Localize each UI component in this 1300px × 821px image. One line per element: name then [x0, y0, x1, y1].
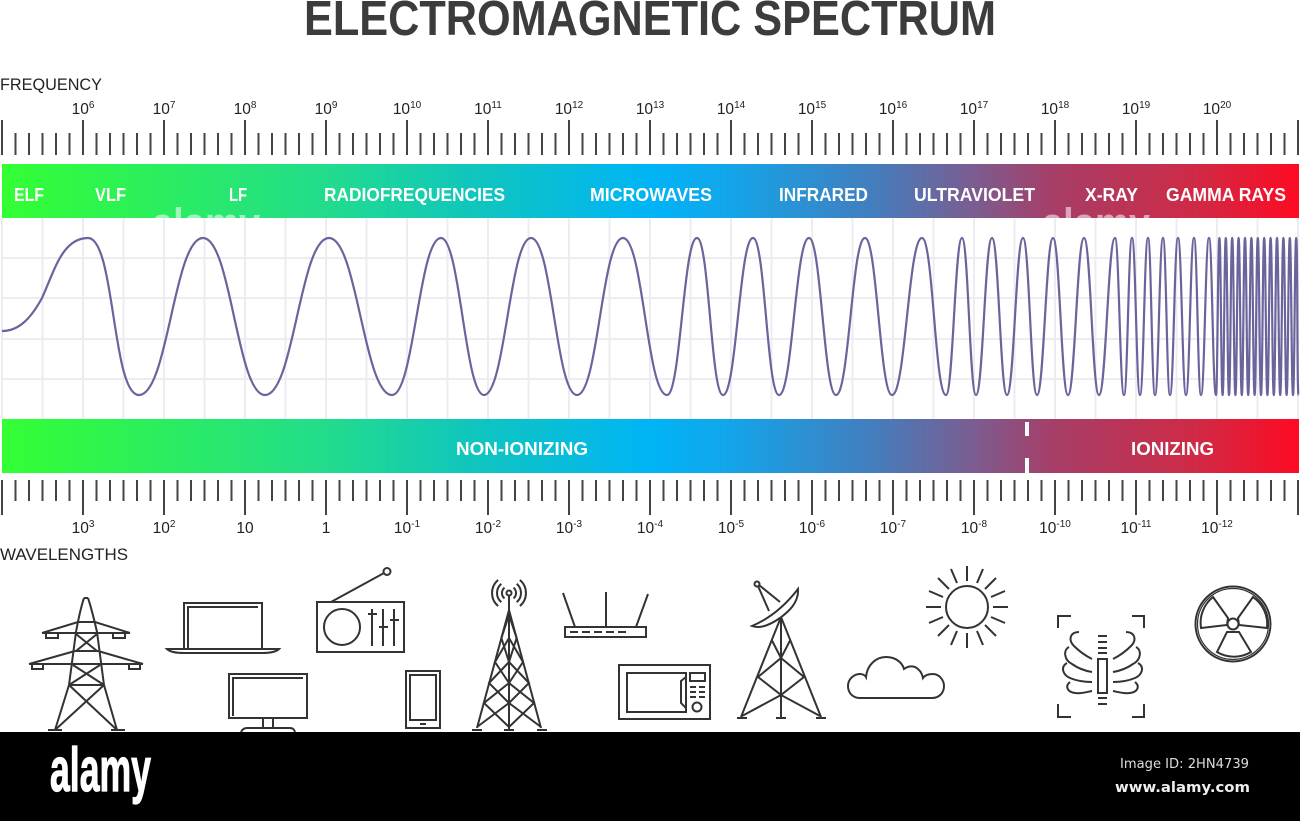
- frequency labels: 10: [153, 101, 170, 118]
- wavelength labels: -4: [654, 519, 664, 530]
- frequency labels: 10: [798, 101, 815, 118]
- icon: satellite dish tower: [737, 582, 826, 718]
- frequency labels: 19: [1139, 100, 1151, 111]
- wavelength labels: -12: [1218, 519, 1233, 530]
- website: www.alamy.com: [1115, 780, 1250, 796]
- ionization band: [2, 419, 1299, 473]
- band labels: GAMMA RAYS: [1166, 185, 1286, 205]
- frequency labels: 7: [170, 100, 176, 111]
- band labels: MICROWAVES: [590, 185, 712, 205]
- frequency labels: 10: [234, 101, 251, 118]
- frequency labels: 8: [251, 100, 257, 111]
- frequency labels: 9: [332, 100, 338, 111]
- icon: wifi router: [563, 592, 648, 637]
- wavelength labels: 10: [394, 520, 411, 537]
- watermark fragments: alamy: [152, 201, 261, 245]
- frequency labels: 6: [89, 100, 95, 111]
- wavelength labels: 2: [170, 519, 176, 530]
- wavelength labels: 1: [322, 520, 330, 537]
- icon: x-ray chest: [1058, 616, 1144, 717]
- band labels: [14, 185, 1286, 205]
- frequency labels: 10: [474, 101, 491, 118]
- wavelength tick scale: [1, 480, 1300, 515]
- wavelength labels: 3: [89, 519, 95, 530]
- wavelength labels: 10: [799, 520, 816, 537]
- wavelength labels: -2: [492, 519, 502, 530]
- wavelength labels: 10: [637, 520, 654, 537]
- wavelength labels: 10: [718, 520, 735, 537]
- wavelength labels: 10: [153, 520, 170, 537]
- frequency labels: 14: [734, 100, 746, 111]
- icon: radio tower: [472, 580, 547, 730]
- wavelength labels: -1: [411, 519, 421, 530]
- frequency labels: 13: [653, 100, 665, 111]
- frequency labels: 10: [717, 101, 734, 118]
- band labels: X-RAY: [1085, 185, 1138, 205]
- ionizing label: IONIZING: [1131, 439, 1214, 459]
- image id: Image ID: 2HN4739: [1120, 756, 1249, 772]
- band labels: LF: [229, 185, 247, 205]
- band labels: ELF: [14, 185, 44, 205]
- frequency labels: 10: [555, 101, 572, 118]
- wavelength labels: -10: [1056, 519, 1071, 530]
- non-ionizing label: NON-IONIZING: [456, 439, 588, 459]
- wavelength labels: -7: [897, 519, 907, 530]
- frequency labels: 10: [636, 101, 653, 118]
- icon: power pylon: [29, 598, 143, 730]
- frequency labels: [72, 100, 1232, 118]
- wavelength labels: [72, 519, 1233, 537]
- icon: radiation symbol: [1196, 586, 1270, 662]
- frequency labels: 18: [1058, 100, 1070, 111]
- footer bar: [0, 732, 1300, 821]
- band labels: ULTRAVIOLET: [914, 185, 1035, 205]
- frequency labels: 17: [977, 100, 989, 111]
- frequency labels: 10: [879, 101, 896, 118]
- frequency labels: 16: [896, 100, 908, 111]
- wavelength labels: 10: [1201, 520, 1218, 537]
- ionizing divider: [1025, 422, 1029, 473]
- icon: radio: [317, 568, 404, 652]
- frequency labels: 10: [410, 100, 422, 111]
- watermark fragments: alamy: [1042, 201, 1151, 245]
- band labels: VLF: [95, 185, 126, 205]
- frequency labels: 15: [815, 100, 827, 111]
- icon: sun: [926, 566, 1008, 648]
- icon: desktop monitor: [229, 674, 307, 732]
- wave chart grid: [1, 218, 1300, 419]
- band labels: INFRARED: [779, 185, 868, 205]
- wavelength labels: 10: [1039, 520, 1056, 537]
- wavelength labels: -3: [573, 519, 583, 530]
- wavelength labels: 10: [880, 520, 897, 537]
- alamy logo: alamy: [50, 736, 151, 805]
- watermark fragments: [155, 207, 1150, 218]
- frequency labels: 10: [960, 101, 977, 118]
- spectrum band: [2, 164, 1299, 218]
- wavelength labels: 10: [475, 520, 492, 537]
- wavelength labels: 10: [236, 520, 254, 537]
- wavelength labels: 10: [556, 520, 573, 537]
- frequency labels: 20: [1220, 100, 1232, 111]
- icon: microwave oven: [619, 665, 710, 719]
- wavelength labels: 10: [961, 520, 978, 537]
- wavelength labels: 10: [1121, 520, 1138, 537]
- frequency heading: FREQUENCY: [0, 75, 102, 94]
- electromagnetic wave: [2, 238, 1298, 395]
- wavelength labels: -5: [735, 519, 745, 530]
- frequency labels: 10: [1203, 101, 1220, 118]
- wavelength labels: -8: [978, 519, 988, 530]
- frequency labels: 12: [572, 100, 584, 111]
- icon: smartphone: [406, 671, 440, 728]
- frequency tick scale: [1, 120, 1300, 155]
- icon: laptop: [167, 603, 279, 653]
- frequency labels: 10: [1041, 101, 1058, 118]
- icon: cloud: [848, 657, 944, 698]
- frequency labels: 10: [1122, 101, 1139, 118]
- wavelength labels: -11: [1138, 519, 1152, 530]
- wavelength labels: -6: [816, 519, 826, 530]
- wavelengths heading: WAVELENGTHS: [0, 545, 128, 564]
- frequency labels: 10: [72, 101, 89, 118]
- frequency labels: 10: [393, 101, 410, 118]
- frequency labels: 10: [315, 101, 332, 118]
- frequency labels: 11: [491, 100, 502, 111]
- wavelength labels: 10: [72, 520, 89, 537]
- band labels: RADIOFREQUENCIES: [324, 185, 505, 205]
